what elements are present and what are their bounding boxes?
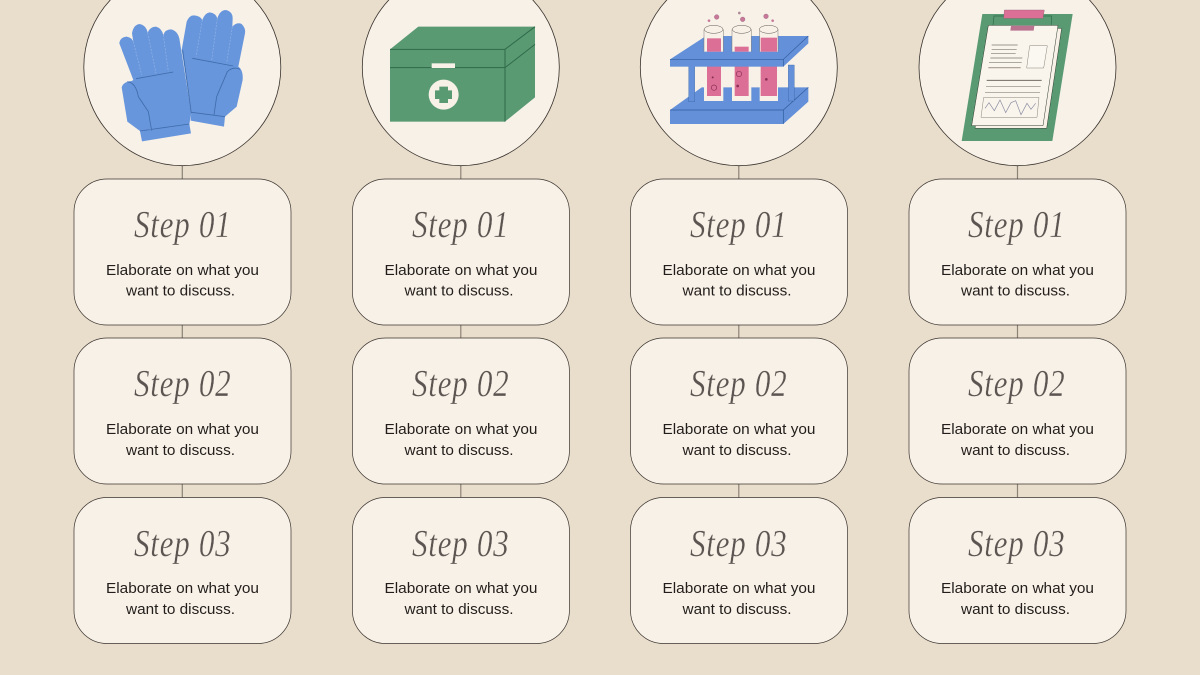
card: step 03	[630, 498, 848, 644]
card: step 02: want to discuss.	[125, 442, 235, 459]
card: step 03: Step 03	[412, 522, 509, 565]
icon: first aid kit	[362, 0, 559, 166]
card: step 02	[909, 338, 1126, 484]
card: step 01: want to discuss.	[125, 282, 235, 300]
card: step 01	[909, 179, 1126, 325]
icon: test tube rack	[640, 0, 837, 166]
card: step 01: Step 01	[690, 203, 787, 246]
card: step 03: Step 03	[134, 522, 231, 565]
card: step 03: want to discuss.	[681, 601, 792, 618]
card: step 02: want to discuss.	[681, 442, 792, 459]
card: step 02: Elaborate on what you	[384, 421, 538, 438]
card: step 03: Elaborate on what you	[662, 580, 816, 597]
card: step 03: want to discuss.	[125, 601, 235, 618]
card: step 01	[630, 179, 848, 325]
card: step 02: Elaborate on what you	[106, 421, 259, 438]
card: step 02	[74, 338, 291, 484]
card: step 01: Elaborate on what you	[106, 262, 259, 279]
card: step 01	[74, 179, 291, 325]
card: step 03: Elaborate on what you	[941, 580, 1094, 597]
icon: clipboard	[919, 0, 1116, 166]
card: step 03: want to discuss.	[403, 601, 514, 618]
card: step 01: Elaborate on what you	[941, 262, 1094, 279]
card: step 02	[352, 338, 569, 484]
card: step 01: Elaborate on what you	[384, 262, 538, 279]
card: step 03: Step 03	[690, 522, 787, 565]
card: step 03: Elaborate on what you	[106, 580, 259, 597]
card: step 03	[74, 498, 291, 644]
card: step 02: Step 02	[968, 362, 1065, 405]
card: step 01: Step 01	[134, 203, 231, 246]
card: step 02: Step 02	[412, 362, 509, 405]
card: step 01: want to discuss.	[960, 282, 1070, 300]
icon: gloves	[84, 0, 281, 166]
card: step 03: Step 03	[968, 522, 1065, 565]
card: step 01: want to discuss.	[681, 282, 792, 300]
card: step 02: Step 02	[134, 362, 231, 405]
column 1: gloves	[74, 0, 291, 643]
card: step 01: Step 01	[412, 203, 509, 246]
column 2: first aid kit	[352, 0, 569, 643]
card: step 02: Step 02	[690, 362, 787, 405]
card: step 02: Elaborate on what you	[941, 421, 1094, 438]
card: step 02: Elaborate on what you	[662, 421, 816, 438]
column 4: clipboard	[909, 0, 1126, 643]
card: step 03: Elaborate on what you	[384, 580, 538, 597]
card: step 01	[352, 179, 569, 325]
card: step 01: want to discuss.	[403, 282, 514, 300]
column 3: test tubes	[630, 0, 848, 643]
card: step 03: want to discuss.	[960, 601, 1070, 618]
card: step 01: Step 01	[968, 203, 1065, 246]
card: step 01: Elaborate on what you	[662, 262, 816, 279]
card: step 02: want to discuss.	[960, 442, 1070, 459]
card: step 02	[630, 338, 848, 484]
card: step 03	[352, 498, 569, 644]
card: step 02: want to discuss.	[403, 442, 514, 459]
card: step 03	[909, 498, 1126, 644]
